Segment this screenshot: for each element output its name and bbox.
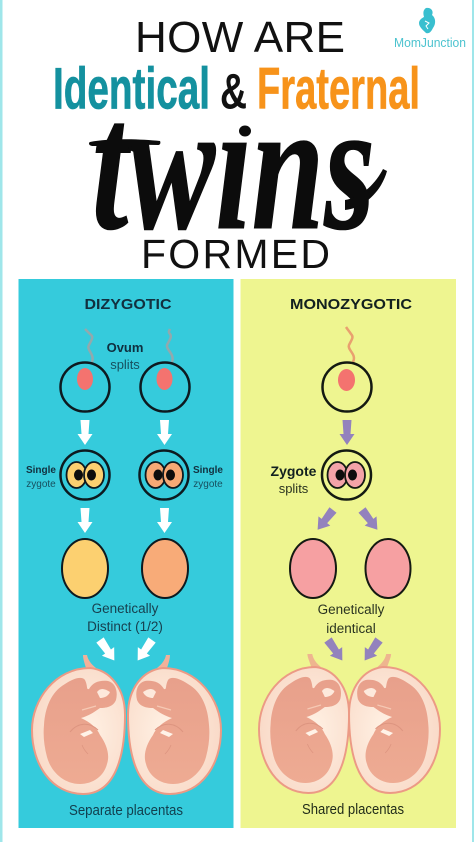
label: genetically distinct bbox=[87, 601, 163, 634]
label: separate placentas: Separate placentas bbox=[69, 802, 183, 819]
zygote right bbox=[140, 450, 188, 500]
label: ovum splits bbox=[107, 340, 143, 372]
label: zygote splits bbox=[271, 463, 317, 496]
fetus: left sac bbox=[32, 655, 125, 794]
arrow: purple down bbox=[340, 420, 354, 445]
label: genetically distinct: Genetically bbox=[92, 601, 159, 616]
arrows: white diagonal bbox=[94, 636, 158, 665]
title: how are: HOW ARE bbox=[135, 13, 345, 62]
heading: dizygotic: DIZYGOTIC bbox=[84, 296, 172, 313]
label: genetically identical bbox=[318, 602, 385, 636]
ovum bbox=[322, 327, 372, 412]
label: ovum splits: Ovum bbox=[107, 340, 143, 355]
panel: dizygotic bbox=[18, 279, 234, 828]
fetus: left half bbox=[259, 654, 349, 793]
label: zygote splits: Zygote bbox=[271, 463, 317, 479]
egg pink right bbox=[366, 539, 410, 598]
ovum right bbox=[140, 329, 190, 412]
fetus: right half bbox=[349, 654, 440, 793]
label: single zygote left: Single bbox=[26, 465, 56, 476]
egg yellow bbox=[62, 539, 108, 598]
label: single zygote right bbox=[193, 465, 223, 490]
label: genetically distinct: Distinct (1/2) bbox=[87, 619, 163, 634]
label: single zygote right: Single bbox=[193, 465, 223, 476]
zygote bbox=[322, 450, 371, 500]
fetus: right sac bbox=[128, 655, 221, 794]
ovum left bbox=[60, 329, 110, 412]
arrows: purple split bbox=[312, 505, 383, 534]
panel: monozygotic bbox=[240, 279, 456, 828]
label: single zygote left: zygote bbox=[26, 479, 56, 490]
arrows: white down bbox=[78, 420, 172, 533]
title: formed: FORMED bbox=[141, 231, 330, 277]
title: identical & fraternal: Identical bbox=[53, 56, 210, 122]
label: shared placentas: Shared placentas bbox=[302, 801, 404, 818]
label: ovum splits: splits bbox=[110, 357, 140, 372]
egg pink left bbox=[290, 539, 336, 598]
heading: monozygotic: MONOZYGOTIC bbox=[290, 296, 412, 313]
label: single zygote left bbox=[26, 465, 56, 490]
arrows: purple diagonal bbox=[322, 636, 385, 665]
label: genetically identical: Genetically bbox=[318, 602, 385, 617]
logo: MomJunction: MomJunction bbox=[394, 35, 466, 50]
logo: MomJunction bbox=[394, 8, 466, 50]
title: identical & fraternal bbox=[53, 56, 420, 122]
zygote left bbox=[60, 450, 110, 500]
label: zygote splits: splits bbox=[279, 481, 309, 496]
title: identical & fraternal: & bbox=[220, 64, 247, 120]
label: single zygote right: zygote bbox=[193, 479, 223, 490]
egg orange bbox=[142, 539, 188, 598]
label: genetically identical: identical bbox=[326, 621, 376, 636]
